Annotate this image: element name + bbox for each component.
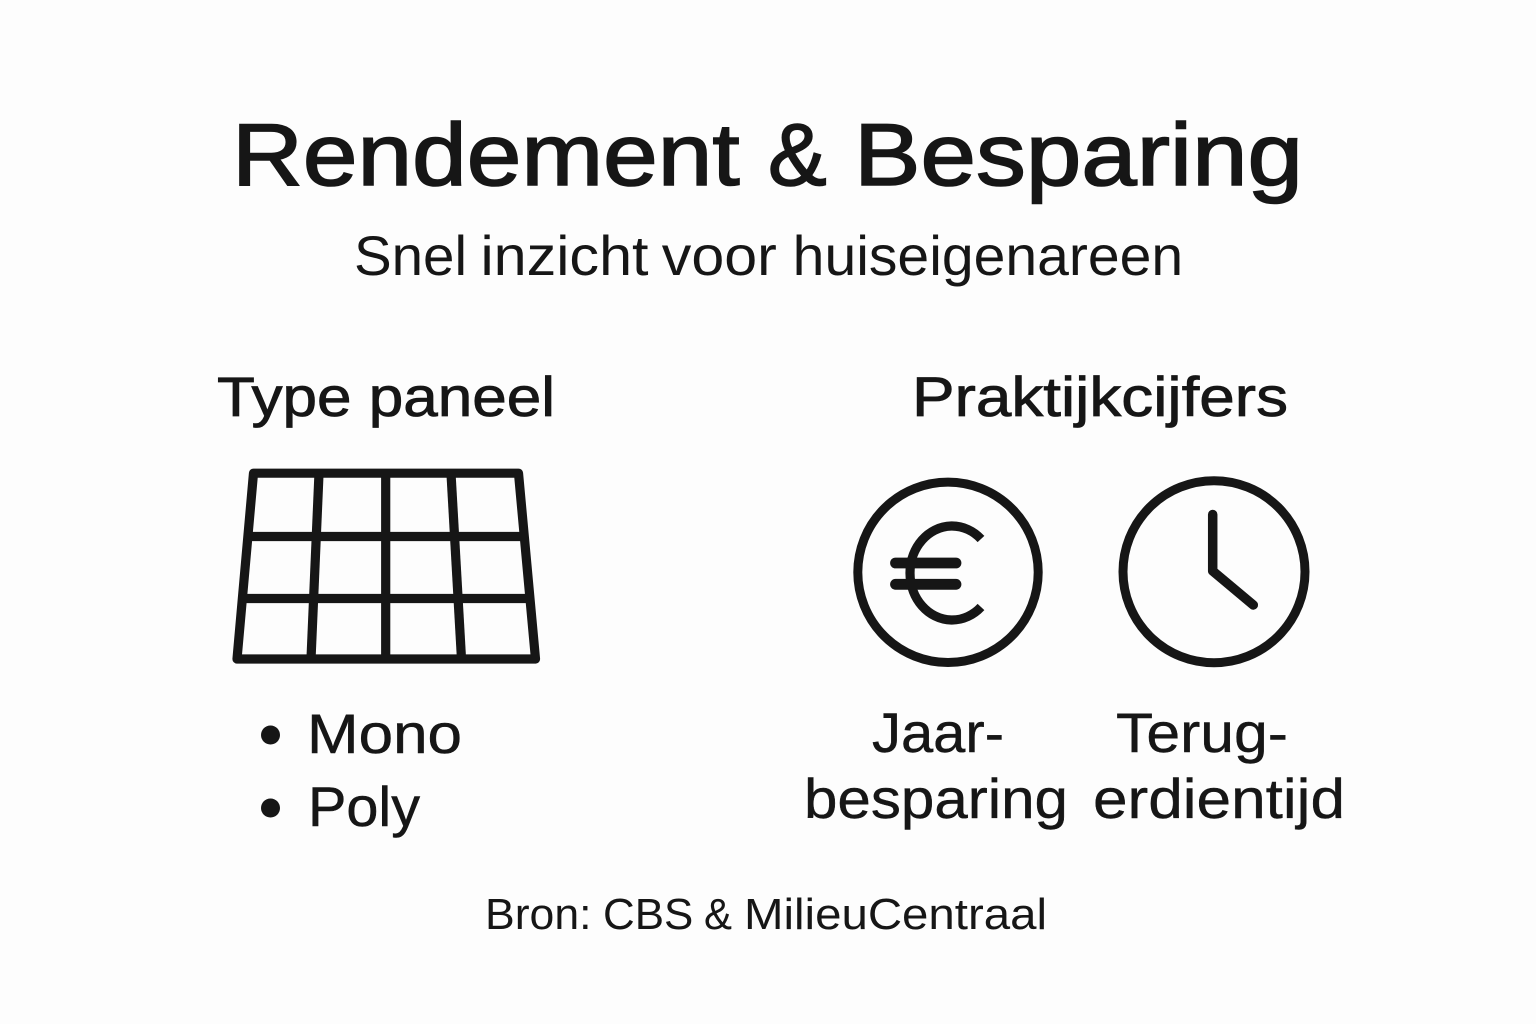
subtitle xyxy=(354,224,1183,287)
source: CBS xyxy=(603,890,693,939)
subtitle: voor xyxy=(662,224,777,287)
source: & xyxy=(704,890,732,939)
label: jaarbesparing xyxy=(804,701,1068,830)
heading: type paneel: Type paneel xyxy=(217,365,555,428)
source: Bron: xyxy=(485,890,592,939)
title xyxy=(232,105,1303,204)
source xyxy=(485,890,1047,939)
subtitle: Snel xyxy=(354,224,467,287)
icon: clock xyxy=(1123,481,1305,663)
icon: solar panel xyxy=(237,473,536,659)
list: panel types xyxy=(261,702,462,838)
label: terugverdientijd xyxy=(1093,701,1345,830)
label: terugverdientijd: Terug- xyxy=(1116,701,1288,764)
subtitle: huiseigenareen xyxy=(793,224,1183,287)
title: & xyxy=(768,105,827,204)
subtitle: inzicht xyxy=(480,224,649,287)
title: Besparing xyxy=(854,105,1303,204)
title: Rendement xyxy=(232,105,740,204)
bullet: poly xyxy=(261,798,280,818)
label: poly: Poly xyxy=(308,775,420,838)
label: jaarbesparing: besparing xyxy=(804,767,1068,830)
bullet: mono xyxy=(261,726,280,744)
label: terugverdientijd: erdientijd xyxy=(1093,767,1345,830)
label: mono: Mono xyxy=(307,702,462,765)
source: MilieuCentraal xyxy=(744,890,1047,939)
label: jaarbesparing: Jaar- xyxy=(872,701,1004,764)
icon: euro coin xyxy=(858,482,1038,662)
heading: praktijkcijfers: Praktijkcijfers xyxy=(912,365,1288,428)
